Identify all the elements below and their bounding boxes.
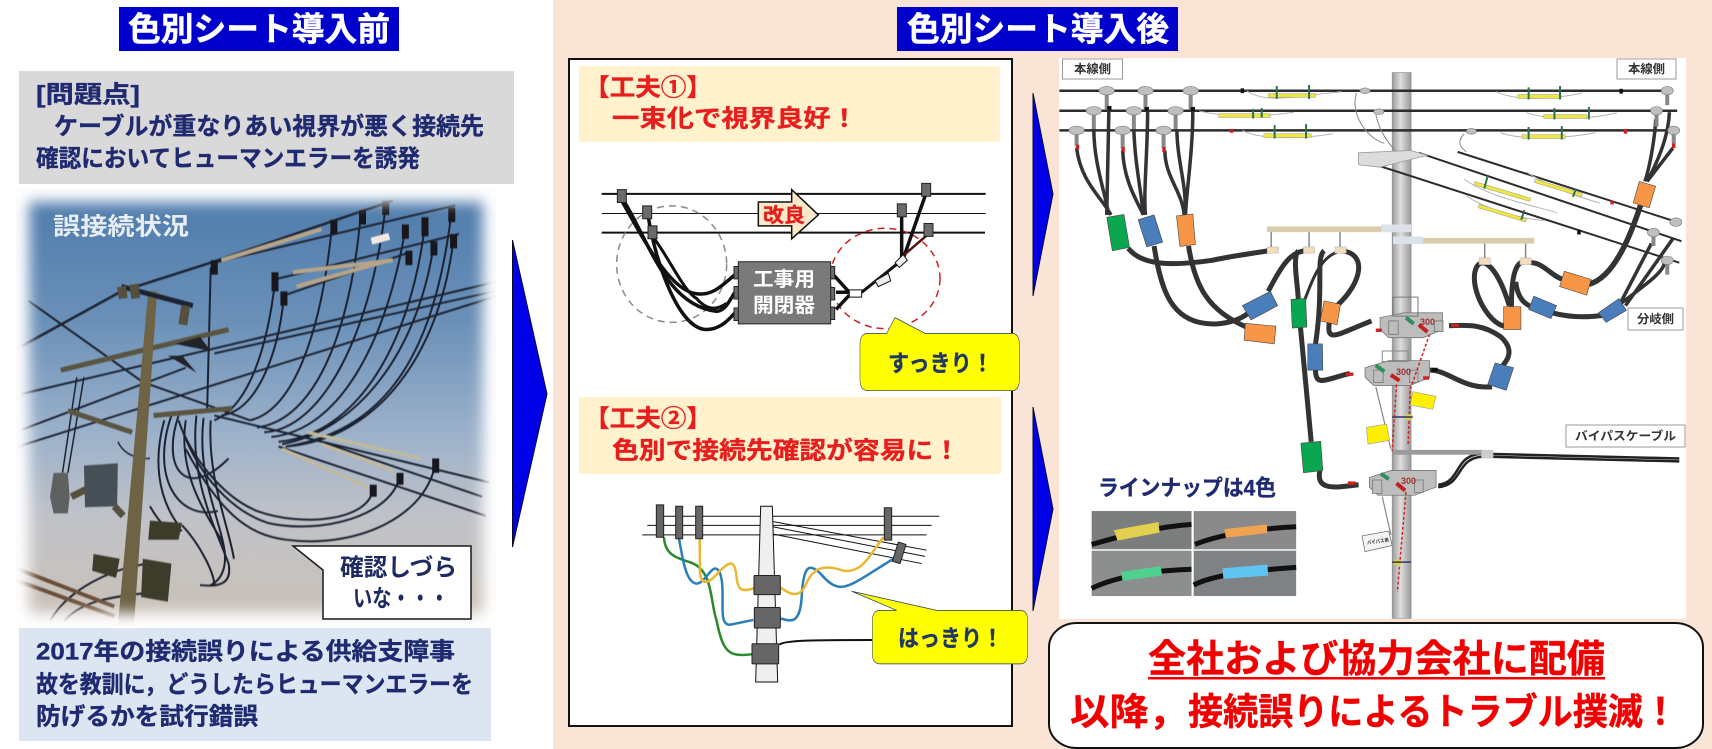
label: switch rating top: 300: [1420, 317, 1435, 327]
colour sheets: [1107, 214, 1323, 473]
text block: lesson: 防げるかを試行錯誤: [36, 704, 258, 730]
diagram: bundled cables: 工事用: [753, 268, 815, 291]
heading: improvement 2: [579, 397, 1001, 474]
switch boxes: [1365, 313, 1443, 495]
label: switch rating middle: 300: [1396, 367, 1411, 377]
text block: lesson: 故を教訓に，どうしたらヒューマンエラーを: [36, 672, 473, 698]
callout: hard to confirm: いな・・・: [353, 586, 449, 612]
label: branch side: [1628, 308, 1683, 330]
insulators: [1077, 93, 1674, 275]
pole and crossarms: [61, 330, 232, 432]
callout: clear: [852, 591, 1028, 664]
diagram: pole with colour sheets: [1059, 58, 1686, 619]
heading: after: 色別シート導入後: [907, 10, 1169, 48]
diagram: bundled cables: [602, 183, 986, 330]
heading: improvement 1: [579, 66, 1000, 142]
heading: improvement 2: 【工夫②】: [584, 406, 712, 432]
arrow: upper: [1033, 93, 1053, 296]
label: main line left: [1062, 59, 1122, 79]
heading: improvement 1: 【工夫①】: [584, 74, 712, 102]
panel: after background: [553, 0, 1712, 749]
label: main line left: 本線側: [1074, 61, 1111, 76]
crossarms: [1267, 226, 1393, 232]
text block: problem: [19, 71, 514, 184]
heading: four colour lineup: ラインナップは4色: [1098, 476, 1276, 500]
label: bypass tag: バイパス用: [1367, 537, 1389, 547]
label: main line right: 本線側: [1628, 61, 1665, 76]
photo label: 誤接続状況: [53, 214, 189, 240]
device bypass wires: [1199, 91, 1617, 221]
callout: hard to confirm: [293, 546, 471, 619]
text block: problem: [問題点]: [36, 82, 140, 108]
pole: [1392, 73, 1411, 618]
label: bypass cable: バイパスケーブル: [1575, 428, 1676, 443]
arrow: lower: [1033, 407, 1053, 611]
label: branch side: 分岐側: [1637, 311, 1674, 326]
callout: clean: [860, 318, 1019, 391]
cables: [1077, 110, 1679, 487]
label: bypass cable: [1566, 425, 1685, 447]
panel: improvements: [569, 59, 1012, 726]
diagram: bundled cables: 開閉器: [753, 295, 815, 317]
text block: problem: ケーブルが重なりあい視界が悪く接続先: [54, 112, 484, 140]
insulators on the wires: [214, 201, 454, 497]
text block: problem: 確認においてヒューマンエラーを誘発: [36, 146, 420, 172]
label: main line right: [1617, 59, 1676, 79]
diagram: colour coded cables: [642, 505, 939, 682]
photos: four colour sheets: [1092, 511, 1296, 596]
label: switch rating bottom: 300: [1401, 476, 1416, 486]
diagram: bundled cables: 改良: [763, 204, 805, 227]
callout: conclusion: 接続誤りによるトラブル撲滅！: [1188, 690, 1678, 732]
arrow: before to after: [512, 240, 547, 547]
small yellow and white tags: [1366, 392, 1436, 444]
callout: conclusion: 全社および協力会社に配備: [1148, 639, 1605, 681]
photo: miswired pole before: [16, 189, 496, 626]
callout: conclusion: [1049, 623, 1703, 748]
heading: improvement 2: 色別で接続先確認が容易に！: [612, 436, 960, 464]
main lines: [1059, 91, 1677, 130]
yellow devices: [1219, 94, 1587, 222]
text block: lesson: [19, 628, 491, 741]
heading: improvement 1: 一束化で視界良好！: [612, 106, 858, 132]
text block: lesson: 2017年の接続誤りによる供給支障事: [36, 638, 455, 666]
callout: conclusion: 以降，: [1070, 692, 1188, 732]
callout: clear: はっきり！: [898, 625, 1003, 651]
heading: before: 色別シート導入前: [128, 10, 390, 48]
callout: hard to confirm: 確認しづら: [340, 554, 457, 582]
transformer: [84, 463, 118, 507]
callout: clean: すっきり！: [888, 350, 993, 376]
